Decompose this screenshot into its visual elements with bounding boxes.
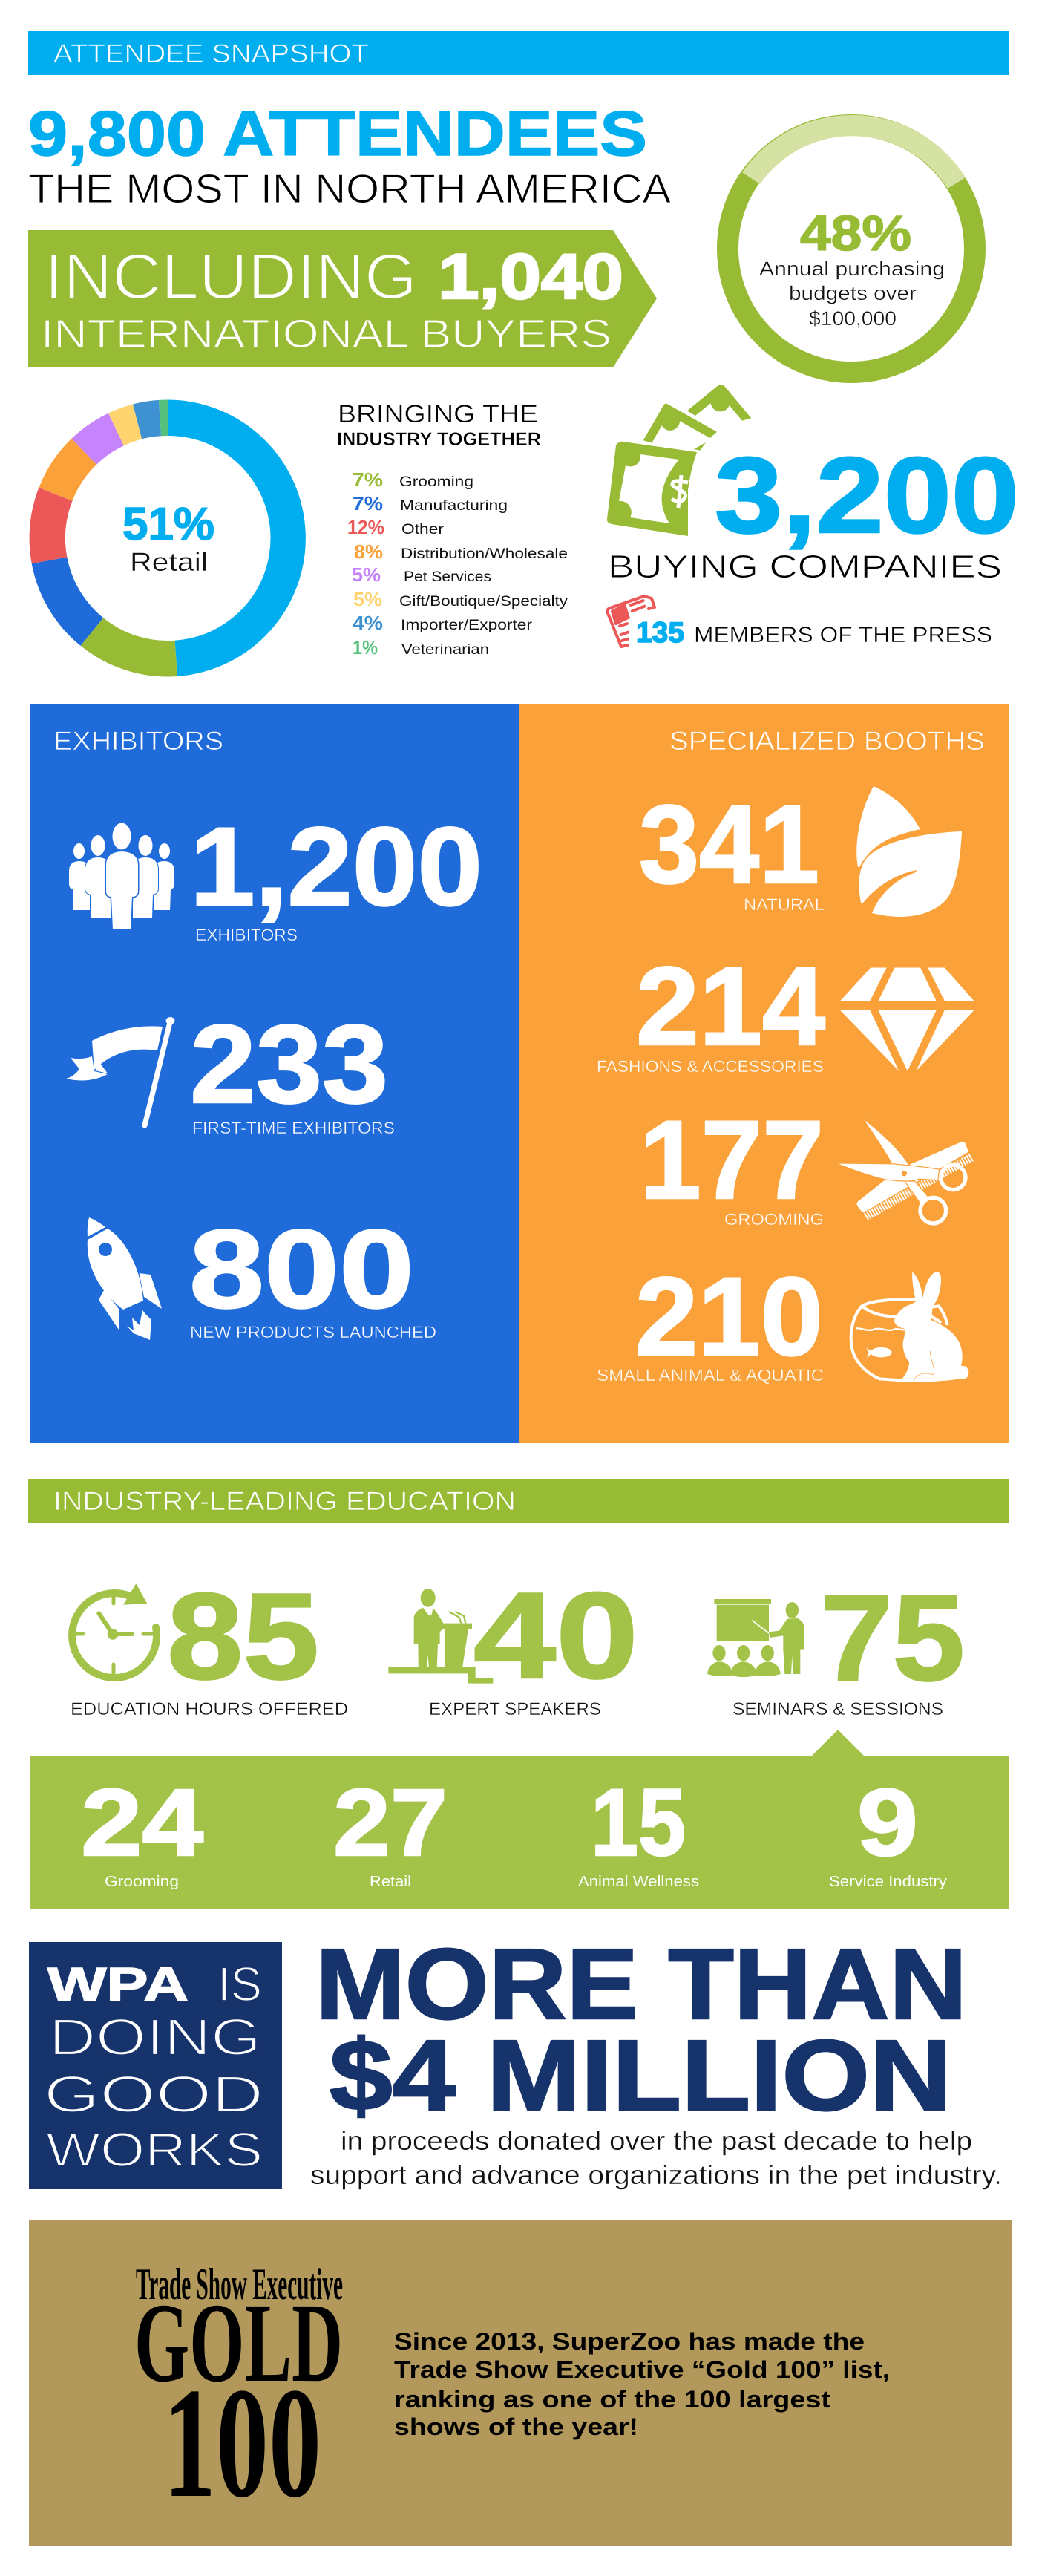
heading: bringing the industry together — [337, 400, 541, 450]
icon: rocket — [88, 1217, 162, 1340]
legend: industry percentages: 4% — [353, 612, 383, 634]
logo: Trade Show Executive Gold 100: 100 — [163, 2356, 321, 2531]
stat: 40 expert speakers: EXPERT SPEAKERS — [429, 1699, 601, 1719]
section header: industry-leading education: INDUSTRY-LEADING EDUCATION — [53, 1487, 516, 1516]
panel: WPA is doing good works: DOING — [49, 2008, 261, 2066]
stat: 9 service industry: 9 — [857, 1770, 918, 1876]
panel: session tracks — [30, 1730, 1009, 1909]
legend: industry percentages: 1% — [353, 636, 378, 658]
ring chart: purchasing budgets 48% — [727, 115, 975, 373]
stat: 800 new products launched: 800 — [189, 1206, 414, 1331]
stat: 1,200 exhibitors: EXHIBITORS — [195, 926, 298, 944]
arrow banner: international buyers: 1,040 — [438, 241, 623, 313]
arrow banner: international buyers — [28, 230, 657, 367]
text block: proceeds donated: support and advance organizations in the pet industry. — [310, 2160, 1002, 2190]
icon: rabbit and fishbowl — [851, 1272, 968, 1382]
ring chart: purchasing budgets 48%: budgets over — [789, 282, 917, 304]
stat: 1,200 exhibitors: 1,200 — [190, 804, 482, 929]
stat: 214 fashions and accessories: 214 — [636, 944, 825, 1068]
ring chart: purchasing budgets 48%: Annual purchasing — [759, 258, 945, 280]
legend: industry percentages: 7% — [353, 468, 383, 491]
stat: 214 fashions and accessories: FASHIONS & ACCESSORIES — [597, 1057, 824, 1076]
logo: Trade Show Executive Gold 100 — [134, 2260, 343, 2531]
panel: WPA is doing good works — [29, 1942, 282, 2189]
stat: 85 education hours offered: EDUCATION HOURS OFFERED — [71, 1699, 348, 1719]
icon: diamond — [840, 968, 974, 1071]
stat: 3,200 buying companies: BUYING COMPANIES — [608, 549, 1002, 585]
stat: 15 animal wellness: Animal Wellness — [578, 1874, 699, 1890]
heading: bringing the industry together: BRINGING THE — [338, 400, 538, 428]
stat: 177 grooming: GROOMING — [724, 1210, 824, 1229]
stat: 341 natural: 341 — [639, 782, 819, 906]
icon: flag — [66, 1017, 175, 1125]
stat: 210 small animal and aquatic: 210 — [635, 1254, 823, 1379]
heading: more than $4 million — [315, 1928, 967, 2131]
stat: 75 seminars and sessions: 75 — [820, 1569, 965, 1706]
logo: Trade Show Executive Gold 100: GOLD — [134, 2281, 343, 2406]
stat: 85 education hours offered: 85 — [167, 1568, 319, 1704]
legend: industry percentages: 5% — [353, 588, 382, 610]
panel: WPA is doing good works: GOOD — [44, 2065, 263, 2123]
text block: Since 2013 — [394, 2328, 890, 2440]
stat: 233 first-time exhibitors: 233 — [190, 1001, 388, 1126]
stat: 135 members of the press: 135 — [636, 617, 684, 649]
legend: industry percentages — [347, 468, 568, 658]
legend: industry percentages: 12% — [347, 516, 384, 538]
panel: specialized booths — [520, 704, 1009, 1443]
text block: Since 2013: ranking as one of the 100 largest — [394, 2386, 830, 2413]
legend: industry percentages: Other — [401, 522, 445, 537]
stat: 135 members of the press — [636, 617, 992, 649]
subheading: the most in North America: THE MOST IN NORTH AMERICA — [28, 166, 671, 212]
panel: WPA is doing good works: WPA — [47, 1958, 189, 2011]
panel: WPA is doing good works: WORKS — [46, 2122, 263, 2177]
stat: 85 education hours offered — [71, 1568, 348, 1719]
panel: WPA is doing good works: IS — [217, 1957, 262, 2011]
icon: speaker at podium — [388, 1589, 493, 1684]
stat: 75 seminars and sessions: SEMINARS & SESSIONS — [732, 1699, 943, 1719]
legend: industry percentages: Importer/Exporter — [401, 618, 533, 633]
stat: 40 expert speakers — [429, 1567, 638, 1719]
icon: newspaper — [607, 596, 655, 647]
stat: 3,200 buying companies — [608, 435, 1019, 585]
donut chart: attendee industry mix — [30, 399, 306, 676]
stat: 9 service industry: Service Industry — [829, 1874, 947, 1890]
stat: 27 retail: Retail — [370, 1874, 411, 1890]
donut chart: attendee industry mix: 51% — [122, 499, 214, 550]
text block: Since 2013: shows of the year! — [394, 2413, 638, 2440]
stat: 3,200 buying companies: 3,200 — [715, 435, 1019, 555]
text block: Since 2013: Trade Show Executive “Gold 100” list, — [394, 2356, 890, 2383]
panel: exhibitors — [30, 704, 520, 1443]
legend: industry percentages: 8% — [354, 540, 383, 563]
stat: 135 members of the press: MEMBERS OF THE PRESS — [694, 623, 992, 647]
stat: 24 grooming: 24 — [81, 1770, 203, 1876]
icon: clock — [72, 1583, 157, 1678]
heading: bringing the industry together: INDUSTRY TOGETHER — [337, 429, 541, 450]
legend: industry percentages: Grooming — [399, 474, 473, 490]
panel heading: exhibitors: EXHIBITORS — [53, 727, 223, 756]
text block: proceeds donated — [310, 2125, 1002, 2190]
legend: industry percentages: Veterinarian — [401, 642, 489, 658]
stat: 9 service industry — [829, 1770, 947, 1890]
section header: attendee snapshot — [28, 31, 1009, 75]
ring chart: purchasing budgets 48%: $100,000 — [809, 307, 897, 330]
panel: gold 100 — [29, 2220, 1012, 2546]
stat: 177 grooming: 177 — [640, 1097, 824, 1222]
legend: industry percentages: 7% — [353, 492, 383, 514]
legend: industry percentages: Gift/Boutique/Specialty — [399, 594, 568, 609]
legend: industry percentages: 5% — [352, 563, 381, 586]
stat: 15 animal wellness: 15 — [591, 1770, 686, 1876]
icon: seminar presenter and audience — [707, 1599, 804, 1677]
panel: gold 100: Trade Show Executive — [136, 2260, 343, 2309]
stat: 75 seminars and sessions — [732, 1569, 965, 1719]
icon: scissors and comb — [839, 1119, 972, 1223]
stat: 27 retail: 27 — [333, 1770, 448, 1876]
ring chart: purchasing budgets 48%: 48% — [800, 206, 911, 261]
heading: more than $4 million: MORE THAN — [315, 1928, 967, 2040]
arrow banner: international buyers: INTERNATIONAL BUYERS — [41, 312, 612, 356]
stat: 233 first-time exhibitors: FIRST-TIME EXHIBITORS — [192, 1119, 395, 1137]
stat: 40 expert speakers: 40 — [473, 1567, 638, 1704]
panel heading: specialized booths: SPECIALIZED BOOTHS — [669, 727, 985, 756]
stat: 341 natural: NATURAL — [744, 895, 825, 914]
arrow banner: international buyers: INCLUDING — [45, 241, 417, 313]
icon: group of people — [69, 823, 174, 929]
stat: 210 small animal and aquatic: SMALL ANIMAL & AQUATIC — [597, 1366, 824, 1385]
icon: leaves — [856, 786, 962, 917]
icon: money bills — [607, 385, 751, 536]
section header: attendee snapshot: ATTENDEE SNAPSHOT — [53, 39, 369, 68]
stat: 800 new products launched — [189, 1206, 436, 1341]
legend: industry percentages: Pet Services — [404, 569, 491, 585]
heading: 9,800 attendees: 9,800 ATTENDEES — [28, 99, 647, 169]
stat: 24 grooming: Grooming — [105, 1874, 179, 1890]
donut chart: attendee industry mix: Retail — [130, 548, 208, 577]
text block: proceeds donated: in proceeds donated over the past decade to help — [341, 2125, 972, 2156]
legend: industry percentages: Distribution/Wholesale — [401, 546, 568, 562]
stat: 800 new products launched: NEW PRODUCTS LAUNCHED — [190, 1323, 436, 1341]
text block: Since 2013: Since 2013, SuperZoo has made the — [394, 2328, 865, 2355]
section header: industry-leading education — [28, 1479, 1009, 1523]
heading: more than $4 million: $4 MILLION — [330, 2019, 951, 2131]
legend: industry percentages: Manufacturing — [400, 498, 508, 514]
